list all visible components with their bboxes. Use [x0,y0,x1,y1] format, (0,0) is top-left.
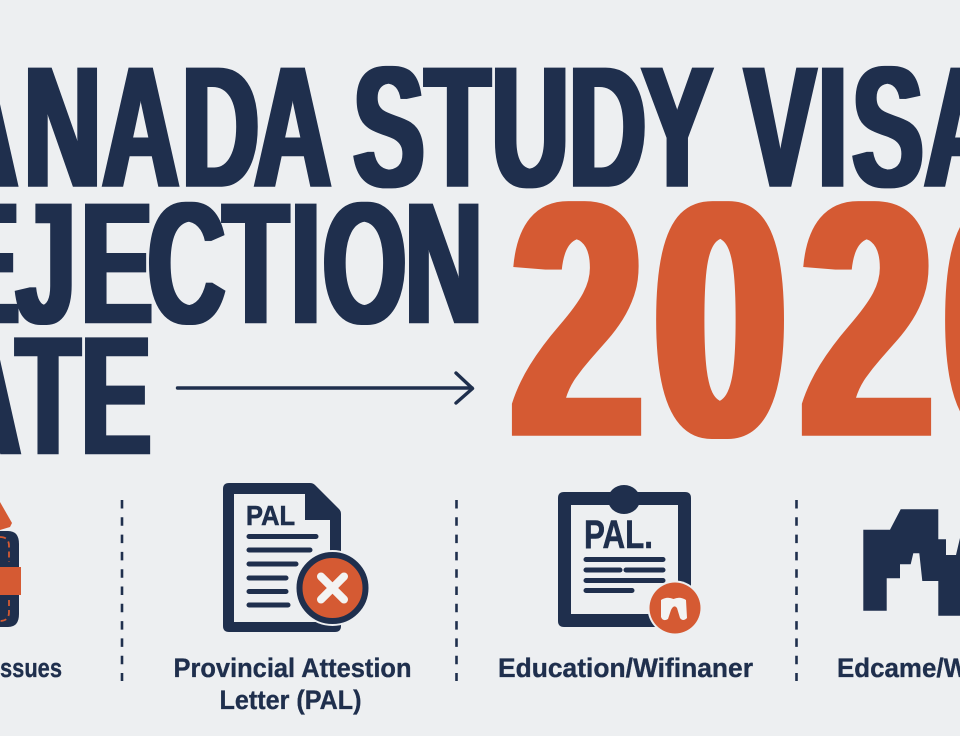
label: issues: ssues [0,653,62,683]
icon: passport or wallet with band [0,502,21,627]
arrow pointing to year [178,373,472,403]
icon: clipboard with badge [558,485,702,636]
panel: education [498,485,753,683]
label: provincial attestion letter: Letter (PAL) [220,685,362,715]
panel: issues [0,502,62,683]
label: provincial attestion letter [174,653,412,715]
icon: abstract skyline silhouette [863,509,960,616]
icon: PAL document with rejection mark: PAL [246,500,295,531]
panel: edcame [837,509,960,683]
label: provincial attestion letter: Provincial Attestion [174,653,412,683]
panel: provincial attestation letter [174,483,412,715]
label: education: Education/Wifinaner [498,653,753,683]
divider dashes [122,500,796,681]
icon: clipboard with badge: PAL. [584,513,653,557]
icon: PAL document with rejection mark [223,483,370,632]
